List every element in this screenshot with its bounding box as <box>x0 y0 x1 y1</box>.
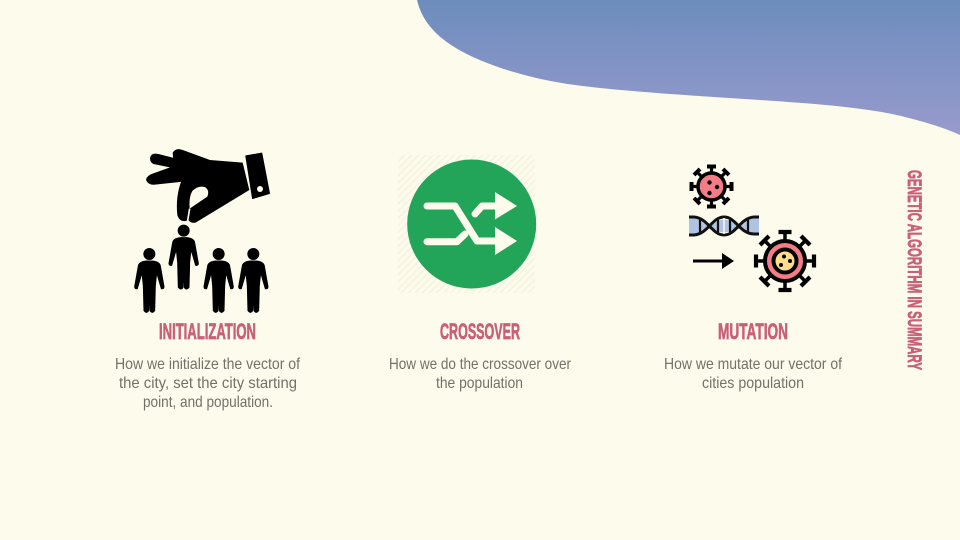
icon part: person 1 <box>135 248 164 312</box>
icon part: raised person <box>169 225 198 289</box>
icon part: arrow <box>693 253 734 269</box>
text block: initialization description: point, and population. <box>143 394 273 411</box>
icon part: dna strand <box>689 217 759 235</box>
icon: crossover shuffle arrows <box>398 155 536 293</box>
text block: initialization description <box>115 356 300 411</box>
heading: initialization: INITIALIZATION <box>159 319 256 344</box>
icon part: small virus <box>692 166 732 206</box>
vertical title: GENETIC ALGORITHM IN SUMMARY <box>903 170 924 370</box>
icon part: large virus <box>756 232 814 290</box>
text block: initialization description: How we initialize the vector of <box>115 356 300 373</box>
text block: crossover description: How we do the crossover over <box>389 356 572 373</box>
icon part: person 4 <box>239 248 268 312</box>
text block: initialization description: the city, set the city starting <box>119 375 297 392</box>
text block: crossover description: the population <box>436 375 523 392</box>
text block: mutation description: cities population <box>702 375 804 392</box>
heading: mutation: MUTATION <box>718 319 788 344</box>
icon: hand picking people <box>135 149 269 312</box>
icon part: hand <box>146 149 269 223</box>
decorative blue wave <box>417 0 960 135</box>
text block: mutation description: How we mutate our vector of <box>664 356 842 373</box>
icon: mutation virus and dna <box>689 166 814 290</box>
text block: mutation description <box>664 356 842 392</box>
heading: crossover: CROSSOVER <box>440 319 520 344</box>
icon part: person 3 <box>204 248 233 312</box>
text block: crossover description <box>389 356 572 392</box>
